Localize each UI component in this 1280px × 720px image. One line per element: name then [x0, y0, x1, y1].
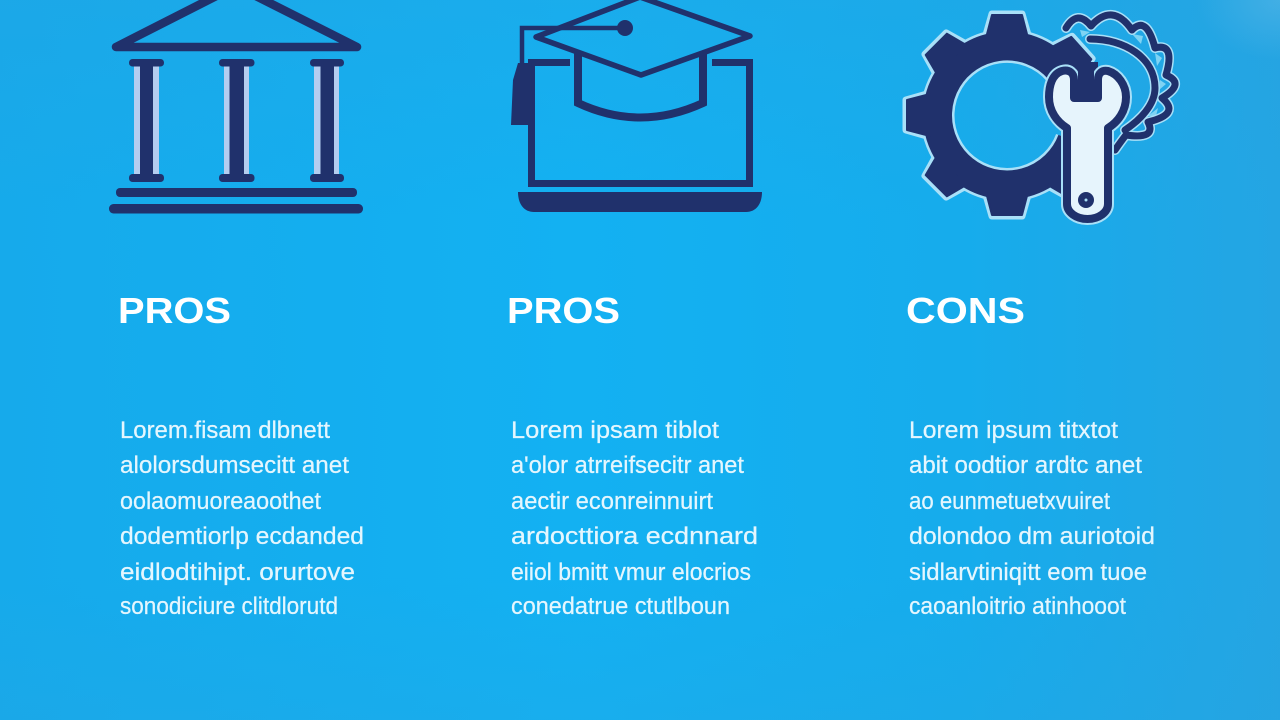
panel: second pros column — [507, 0, 762, 620]
text block: cons description: Lorem ipsum titxtot — [909, 417, 1118, 444]
heading: pros: PROS — [118, 290, 231, 331]
icon: graduation cap on laptop — [511, 0, 762, 212]
small outlined gear — [1066, 15, 1175, 150]
text block: cons description: ao eunmetuetxvuiret — [909, 488, 1110, 515]
text block: cons description — [909, 417, 1155, 620]
icon: classical building — [109, 0, 363, 214]
icon: gear and wrench — [906, 14, 1175, 219]
text block: first pros description: Lorem.fisam dlbnett — [120, 417, 330, 444]
wrench — [1049, 62, 1126, 219]
text block: cons description: dolondoo dm auriotoid — [909, 523, 1155, 550]
text block: first pros description: sonodiciure clitdlorutd — [120, 593, 338, 620]
panel: cons column — [906, 14, 1175, 620]
heading: pros: PROS — [507, 290, 620, 331]
large solid gear — [906, 14, 1098, 216]
panel: first pros column — [109, 0, 364, 620]
text block: second pros description: eiiol bmitt vmur elocrios — [511, 559, 751, 586]
text block: cons description: caoanloitrio atinhooot — [909, 593, 1126, 620]
text block: first pros description: alolorsdumsecitt anet — [120, 452, 349, 479]
text block: second pros description: conedatrue ctutlboun — [511, 593, 730, 620]
text block: cons description: abit oodtior ardtc anet — [909, 452, 1142, 479]
text block: first pros description — [120, 417, 364, 620]
text block: second pros description: a'olor atrreifsecitr anet — [511, 452, 744, 479]
text block: first pros description: oolaomuoreaoothet — [120, 488, 321, 515]
text block: second pros description: Lorem ipsam tiblot — [511, 417, 719, 444]
text block: second pros description: ardocttiora ecdnnard — [511, 523, 758, 550]
text block: cons description: sidlarvtiniqitt eom tuoe — [909, 559, 1147, 586]
text block: first pros description: dodemtiorlp ecdanded — [120, 523, 364, 550]
text block: first pros description: eidlodtihipt. orurtove — [120, 559, 355, 586]
text block: second pros description — [511, 417, 758, 620]
heading: cons: CONS — [906, 290, 1025, 331]
text block: second pros description: aectir econreinnuirt — [511, 488, 713, 515]
